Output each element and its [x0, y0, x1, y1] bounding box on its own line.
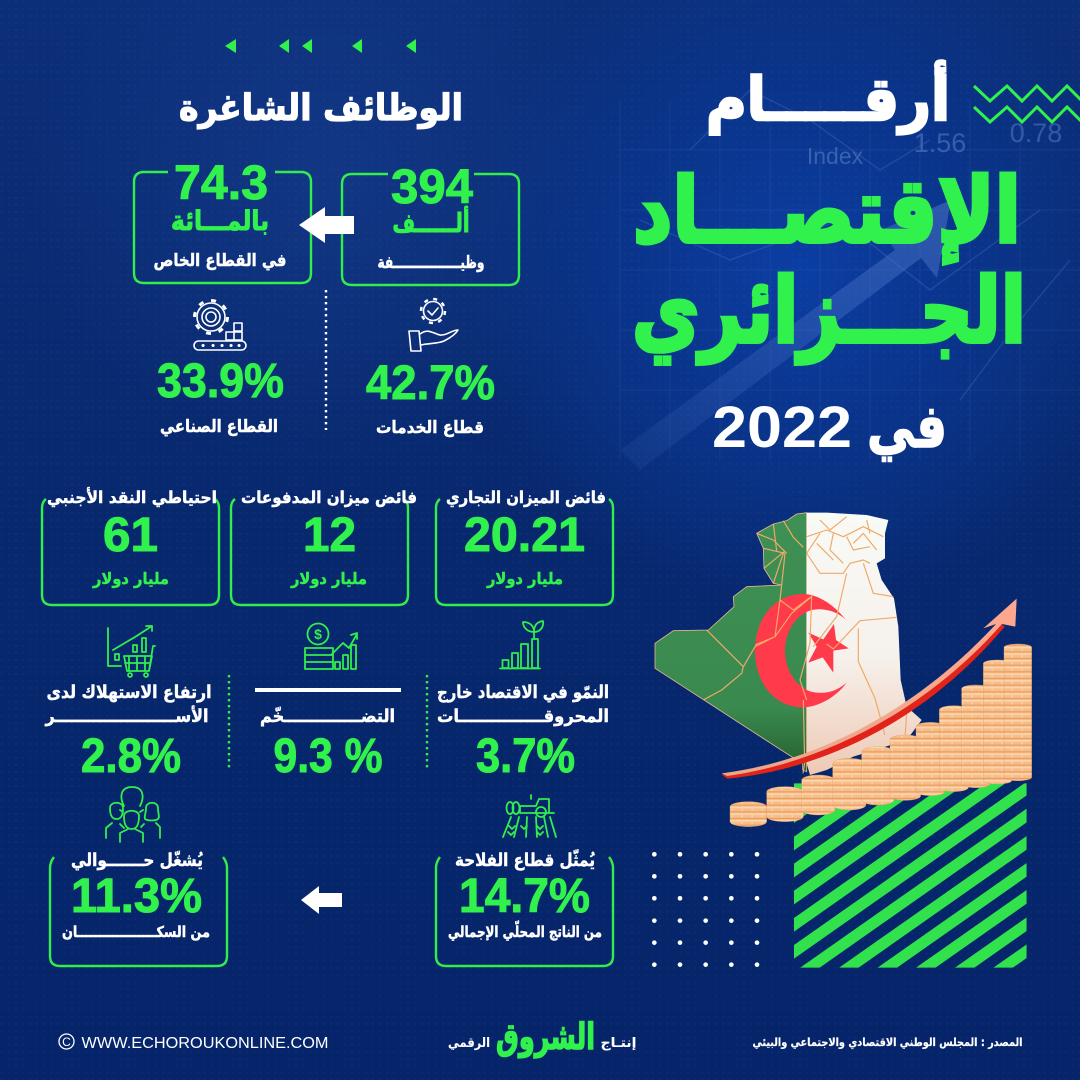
background: 0.78 [1010, 118, 1062, 148]
icon: tractor and field [503, 795, 556, 837]
stat: non-hydrocarbon growth: النمّو في الاقتصاد خارج [437, 683, 609, 703]
footer: logo: الرقمي [448, 1036, 490, 1051]
panel: foreign reserves: 61 [103, 509, 158, 562]
stat: industry 33.9 percent: القطاع الصناعي [160, 417, 278, 437]
footer: logo: الشروق [496, 1017, 595, 1058]
panel: 394 thousand jobs: وظيــــــــــــــــفة [378, 253, 484, 273]
stat: non-hydrocarbon growth: المحروقـــــــــــــــات [437, 707, 609, 727]
icon: group of people [106, 787, 160, 842]
stat: non-hydrocarbon growth: 3.7% [476, 730, 575, 783]
icon: growth plant bars [500, 621, 543, 668]
stat: household consumption: الأســــــــــــــــــــــر [45, 705, 208, 727]
panel: trade balance surplus: 20.21 [464, 509, 585, 562]
panel: 74.3 percent private sector: 74.3 [174, 157, 268, 210]
icon: zigzag lines [974, 86, 1080, 122]
main title [632, 60, 1026, 462]
icon: industry gear and conveyor [194, 300, 246, 350]
main title: الإقتصـــاد [633, 159, 1021, 265]
footer: website: C [62, 1035, 71, 1049]
heading: vacant jobs: الوظائف الشاغرة [179, 88, 463, 129]
panel: 74.3 percent private sector: في القطاع الخاص [154, 251, 286, 271]
icon: inflation coin and bars: $ [314, 626, 322, 642]
main title: في [867, 392, 947, 462]
stat: inflation: التضــــــــــــــخّم [260, 707, 395, 727]
panel: balance of payments surplus: فائض ميزان المدفوعات [241, 488, 417, 508]
panel: balance of payments surplus: 12 [303, 509, 356, 562]
map of Algeria with flag [655, 513, 922, 775]
icon: services hand and gear [409, 299, 458, 351]
panel: 394 thousand jobs: 394 [391, 161, 473, 214]
panel: agriculture employment: 11.3% [71, 870, 202, 923]
decorative arrowheads row [225, 39, 416, 53]
main title: 2022 [712, 395, 852, 460]
stat: household consumption: ارتفاع الاستهلاك لدى [46, 683, 212, 703]
stat: household consumption: 2.8% [81, 730, 181, 783]
decorative dot grid [652, 852, 759, 967]
footer: logo: إنتـاج [600, 1036, 636, 1051]
stat: services 42.7 percent [366, 357, 495, 438]
arrow: agriculture to employment [301, 886, 342, 914]
panel: foreign reserves: احتياطي النقد الأجنبي [47, 487, 217, 508]
stat: non-hydrocarbon growth [437, 683, 609, 783]
stat: services 42.7 percent: قطاع الخدمات [376, 418, 484, 438]
panel: agriculture share: من الناتج المحلّي الإجمالي [448, 921, 602, 941]
panel: foreign reserves: مليار دولار [92, 570, 169, 588]
arrow: jobs to private sector [299, 207, 354, 243]
stat: services 42.7 percent: 42.7% [366, 357, 495, 410]
background: 1.56 [914, 128, 966, 158]
stat: inflation [255, 688, 401, 783]
panel: balance of payments surplus [231, 488, 417, 605]
panel: agriculture employment: من السكــــــــــــــــــان [62, 923, 210, 941]
main title: أرقـــــام [706, 60, 950, 135]
panel: 394 thousand jobs: ألــــــف [392, 206, 470, 239]
stat: household consumption [45, 683, 212, 783]
growth arrow [722, 599, 1017, 779]
panel: agriculture employment: يُشغّل حـــــــوالي [71, 851, 203, 871]
icon: consumption cart [108, 626, 155, 677]
panel: 394 thousand jobs [342, 161, 519, 285]
panel: trade balance surplus: فائض الميزان التجاري [446, 488, 606, 508]
panel: trade balance surplus: مليار دولار [486, 570, 563, 588]
panel: agriculture share [436, 850, 613, 966]
province borders [703, 517, 907, 773]
icon: inflation coin and bars [305, 624, 357, 669]
flag star [808, 624, 849, 673]
stat: inflation: 9.3 % [274, 730, 382, 783]
panel: 74.3 percent private sector [134, 157, 311, 283]
divider: dotted vertical line [325, 290, 327, 430]
panel: balance of payments surplus: مليار دولار [290, 570, 367, 588]
panel: trade balance surplus [436, 488, 613, 605]
divider: dotted green lines [229, 675, 427, 768]
coin stacks [730, 644, 1032, 827]
stat: industry 33.9 percent [157, 355, 284, 437]
panel: agriculture share: يُمثّل قطاع الفلاحة [455, 850, 595, 871]
panel: agriculture employment [50, 851, 227, 966]
background: Index [807, 143, 864, 169]
flag crescent [755, 594, 847, 707]
footer: source: المصدر : المجلس الوطني الاقتصادي والاجتماعي والبيئي [752, 1035, 1022, 1050]
panel: foreign reserves [42, 487, 219, 605]
panel: 74.3 percent private sector: بالمـــائة [171, 206, 269, 237]
footer: website: WWW.ECHOROUKONLINE.COM [82, 1035, 328, 1052]
panel: agriculture share: 14.7% [459, 870, 590, 923]
decorative green stripes [794, 783, 1027, 968]
stat: industry 33.9 percent: 33.9% [157, 355, 284, 408]
